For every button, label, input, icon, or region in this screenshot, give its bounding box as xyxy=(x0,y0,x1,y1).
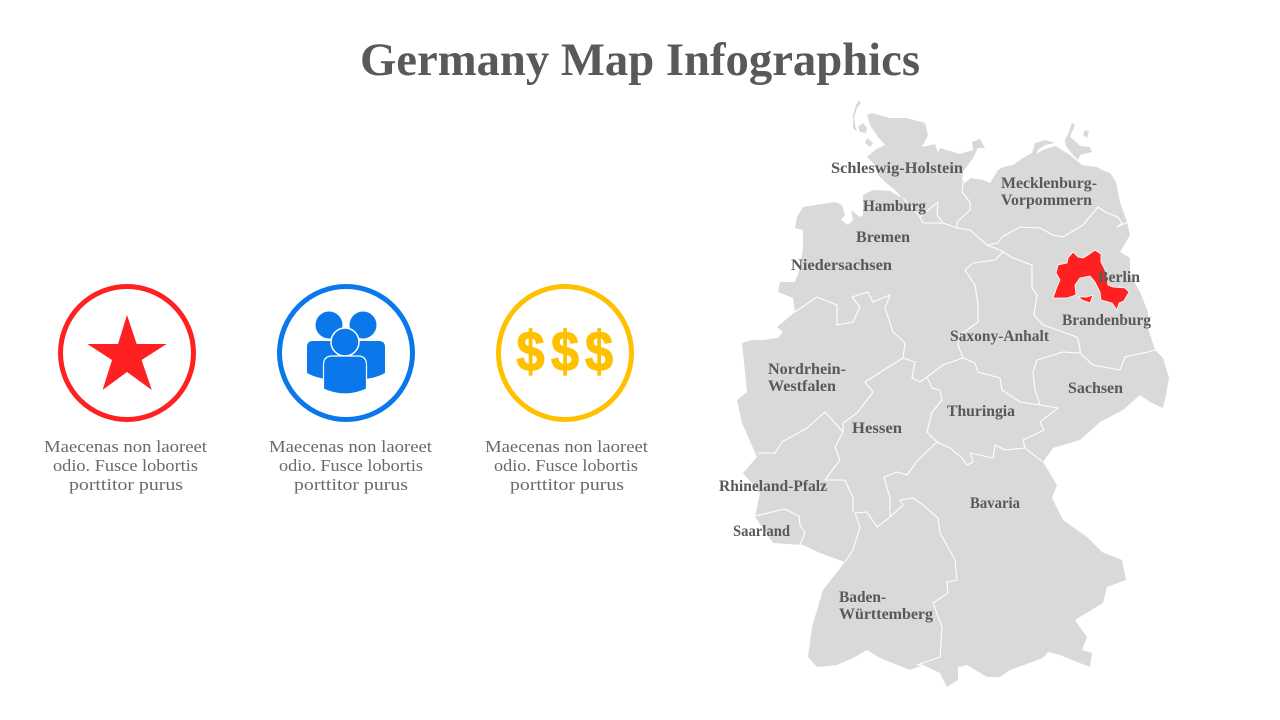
map labels: Vorpommern xyxy=(1001,192,1092,209)
icon: red star in ring xyxy=(60,286,194,420)
map labels: Westfalen xyxy=(768,378,836,395)
map labels: Hamburg xyxy=(863,198,926,215)
icon: yellow dollars in ring: $ xyxy=(551,320,579,384)
panel: dollar feature xyxy=(485,286,648,494)
text block: people caption: porttitor purus xyxy=(294,475,408,494)
map labels: Bremen xyxy=(856,229,910,246)
map labels xyxy=(719,160,1151,623)
panel: star feature xyxy=(44,286,207,494)
text block: star caption: porttitor purus xyxy=(69,475,183,494)
map labels: Nordrhein- xyxy=(768,361,846,378)
icon: yellow dollars in ring xyxy=(498,286,632,420)
state borders xyxy=(755,178,1155,665)
map labels: Rhineland-Pfalz xyxy=(719,478,827,495)
map of Germany xyxy=(719,100,1169,687)
icon: yellow dollars in ring: $ xyxy=(516,320,544,384)
text block: dollar caption: Maecenas non laoreet xyxy=(485,437,648,456)
text block: dollar caption: odio. Fusce lobortis xyxy=(494,456,638,475)
map labels: Sachsen xyxy=(1068,380,1123,397)
text block: dollar caption xyxy=(485,437,648,494)
text block: star caption: Maecenas non laoreet xyxy=(44,437,207,456)
text block: dollar caption: porttitor purus xyxy=(510,475,624,494)
icon: blue people in ring xyxy=(280,286,412,420)
map labels: Thuringia xyxy=(947,403,1015,420)
map labels: Württemberg xyxy=(839,606,933,623)
map labels: Mecklenburg- xyxy=(1001,175,1097,192)
map labels: Saxony-Anhalt xyxy=(950,328,1050,345)
map labels: Saarland xyxy=(733,523,790,540)
map labels: Niedersachsen xyxy=(791,257,892,274)
text block: people caption xyxy=(269,437,432,494)
map labels: Schleswig-Holstein xyxy=(831,160,963,177)
map landmass xyxy=(737,100,1169,687)
icon: yellow dollars in ring: $ xyxy=(585,320,613,384)
text block: star caption: odio. Fusce lobortis xyxy=(53,456,198,475)
title: Germany Map Infographics xyxy=(360,34,920,86)
highlighted region: Brandenburg in red xyxy=(1053,250,1129,310)
map labels: Berlin xyxy=(1098,269,1140,286)
text block: people caption: Maecenas non laoreet xyxy=(269,437,432,456)
text block: people caption: odio. Fusce lobortis xyxy=(279,456,423,475)
map labels: Hessen xyxy=(852,420,902,437)
map labels: Bavaria xyxy=(970,495,1020,512)
map labels: Baden- xyxy=(839,589,886,606)
map labels: Brandenburg xyxy=(1062,312,1151,329)
text block: star caption xyxy=(44,437,207,494)
panel: people feature xyxy=(269,286,432,494)
map islands xyxy=(853,100,861,132)
